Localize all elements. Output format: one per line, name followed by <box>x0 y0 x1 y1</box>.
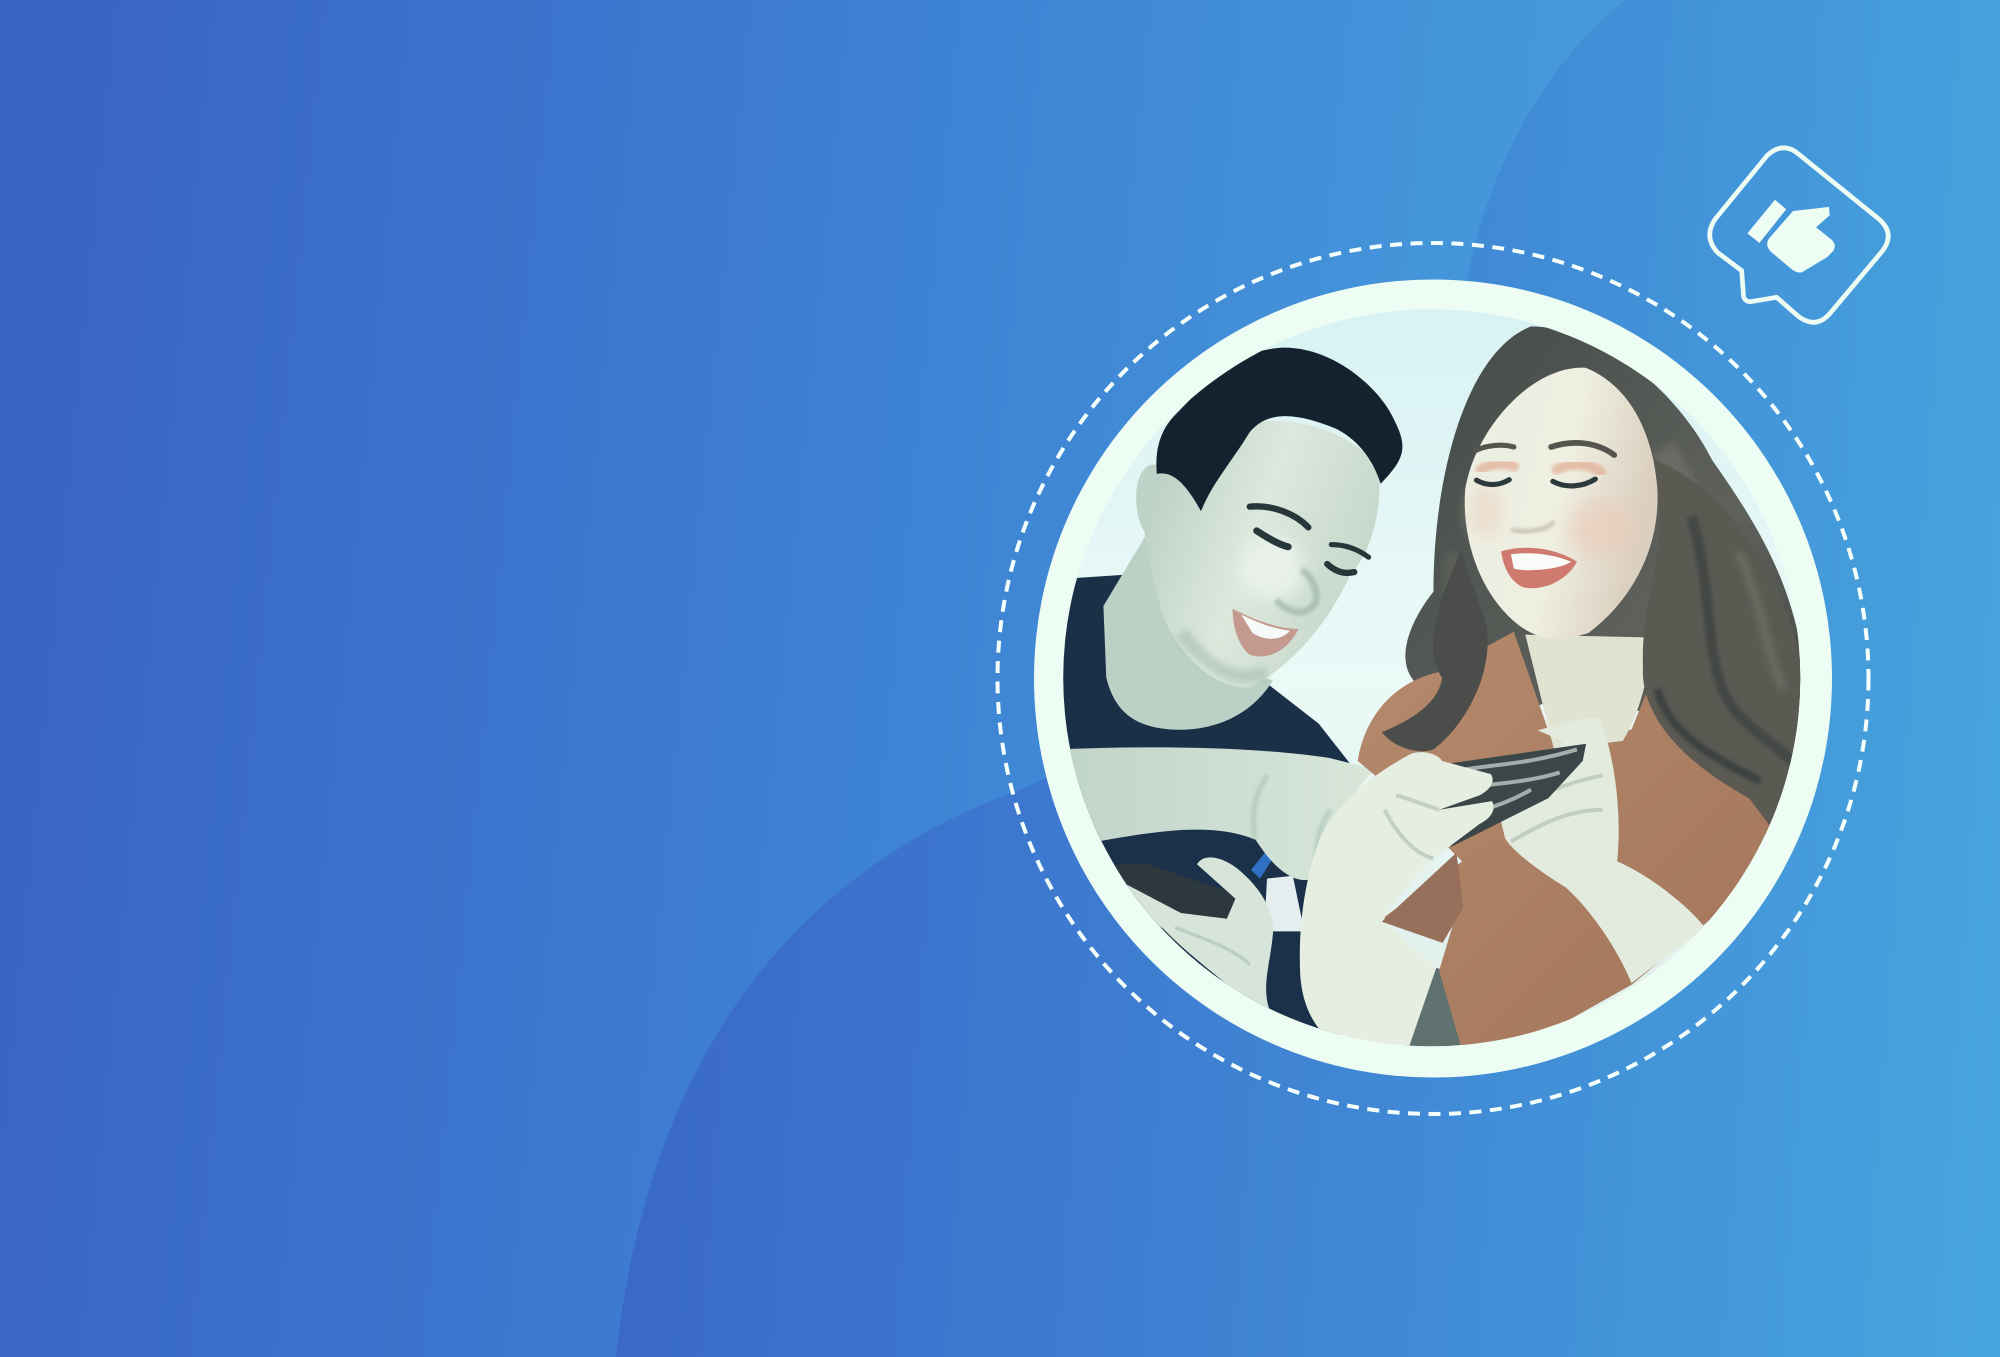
photo backdrop <box>1084 309 1780 1018</box>
man's smile <box>1233 609 1299 656</box>
outer light ring <box>1034 280 1832 1078</box>
woman's blouse <box>1358 632 1802 1051</box>
photo: man and woman looking at a phone <box>1055 305 1807 1051</box>
man's face <box>1145 421 1379 688</box>
woman's eye makeup, brows and eyes <box>1475 443 1614 486</box>
woman's phone <box>1440 744 1586 846</box>
background blob <box>616 0 2000 1357</box>
woman's chest <box>1525 635 1652 749</box>
woman's hair back <box>1382 326 1802 847</box>
woman's face <box>1465 368 1658 639</box>
man's ear <box>1136 464 1158 533</box>
woman's right forearm and hand <box>1497 718 1704 983</box>
man's hair <box>1156 348 1402 511</box>
man's shirt <box>1060 574 1350 1051</box>
woman's smile <box>1501 548 1577 588</box>
man's eyes and brows <box>1250 506 1369 573</box>
man's lower hand <box>1126 857 1273 1011</box>
thumb hand <box>1748 201 1834 272</box>
icon: thumbs up speech bubble <box>1710 148 1888 322</box>
man's neck <box>1103 534 1273 730</box>
woman's hair front curls <box>1382 460 1802 844</box>
man's forearm <box>1055 747 1375 880</box>
couch <box>1402 968 1465 1051</box>
dashed ring <box>998 243 1868 1114</box>
man's phone <box>1114 864 1236 924</box>
woman's sleeve <box>1382 853 1463 943</box>
bubble outline <box>1710 148 1888 322</box>
woman's left hand and forearm <box>1300 752 1494 1051</box>
